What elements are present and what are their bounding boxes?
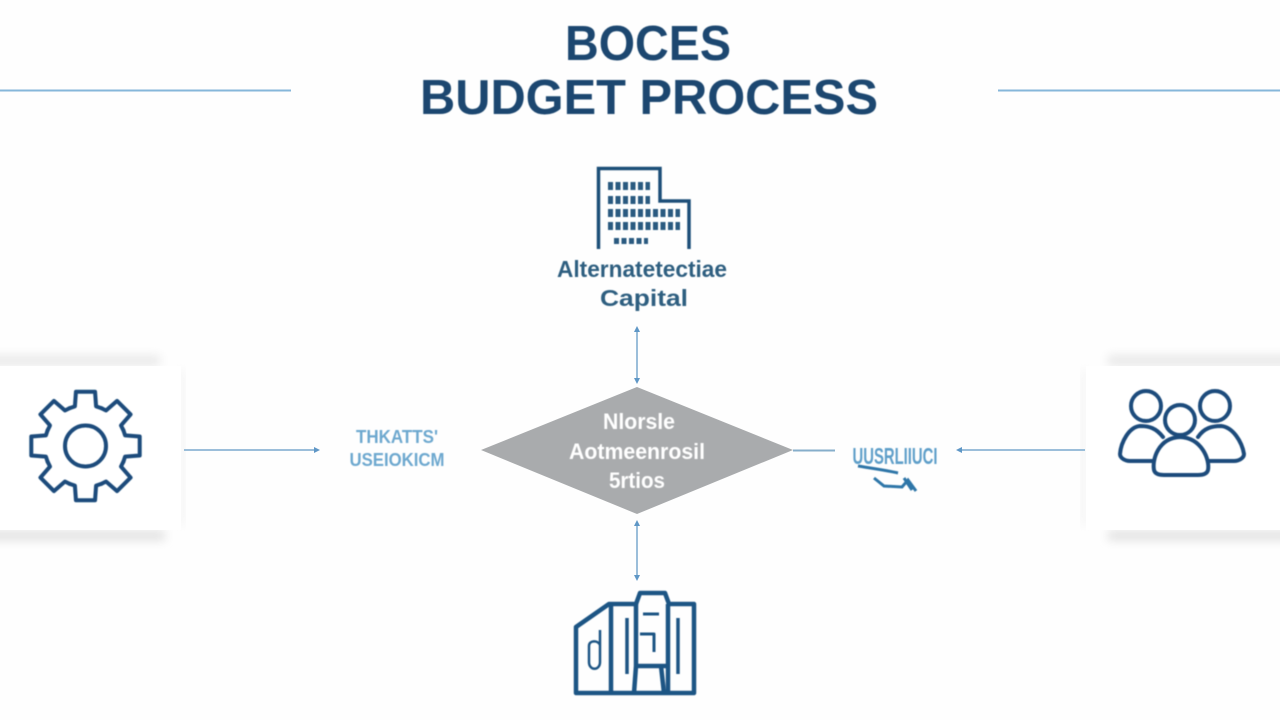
icon: bottom building [576, 593, 694, 693]
connector stub: diamond to right [793, 450, 835, 452]
label: right connector: UUSRLIIUCI [852, 443, 938, 469]
title [420, 17, 878, 125]
label: left connector [350, 427, 444, 470]
squiggle mark [858, 466, 916, 491]
label: top building caption [557, 256, 727, 311]
arrow: left horizontal connector [184, 447, 320, 453]
diamond text: Aotmeenrosil [569, 439, 705, 464]
icon: people group [1120, 391, 1244, 475]
label: left connector: USEIOKICM [350, 450, 444, 470]
right title rule [998, 90, 1280, 92]
label: left connector: THKATTS' [356, 427, 438, 447]
panel: right people card [1082, 356, 1280, 540]
label: top building caption: Capital [600, 285, 688, 311]
panel: left gear card [0, 356, 184, 540]
arrow: top vertical connector [634, 326, 640, 384]
icon: top office building [598, 168, 689, 249]
building windows [608, 186, 680, 241]
arrow: bottom vertical connector [634, 520, 640, 581]
arrow: right horizontal connector [956, 447, 1085, 453]
label: top building caption: Alternatetectiae [557, 256, 727, 282]
diamond text: 5rtios [609, 468, 665, 493]
icon: gear [31, 392, 140, 500]
label: right connector [852, 443, 938, 491]
central diamond [481, 387, 793, 514]
left title rule [0, 90, 291, 92]
diamond text: Nlorsle [603, 409, 675, 434]
title: BUDGET PROCESS [420, 71, 878, 125]
title: BOCES [565, 17, 731, 71]
diamond text [569, 409, 705, 493]
